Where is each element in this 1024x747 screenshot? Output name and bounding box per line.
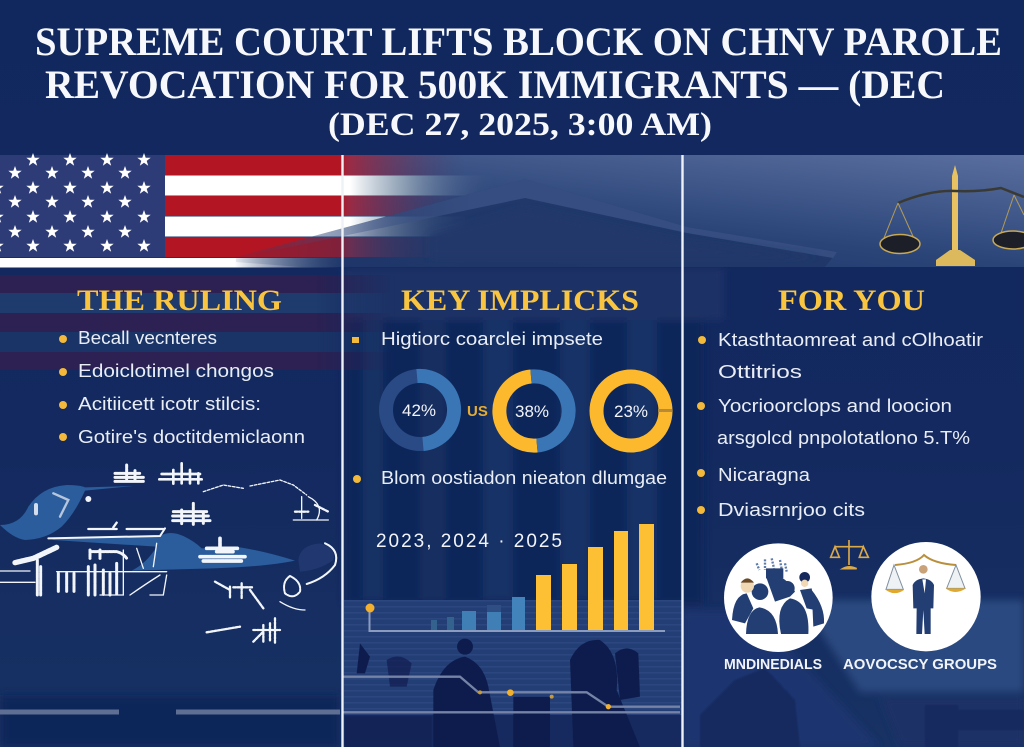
background: lower dark base (344, 668, 1024, 747)
donut chart: 38% (499, 376, 569, 446)
icon: advocacy figure with scales (871, 542, 981, 651)
hero band: sky background (0, 155, 1024, 267)
donut chart: 23%: 23% (614, 402, 648, 421)
donut chart: 38%: 38% (515, 402, 549, 421)
courthouse pediment (236, 179, 837, 267)
label: individuals: MNDINEDIALS (724, 656, 822, 673)
bullet list: for you: Yocrioorclops and loocion (718, 396, 952, 416)
bullet list: for you: Ktasthtaomreat and cOlhoatir (718, 330, 983, 350)
bullet: change: Blom oostiadon nieaton dlumgae (381, 468, 667, 488)
bullet list: for you (697, 330, 983, 520)
page title (35, 19, 1002, 143)
icon: gold scales of justice (880, 165, 1024, 266)
bullet list: for you: arsgolcd pnpolotatlono 5.T% (717, 428, 970, 448)
heading: The Ruling: THE RULING (77, 284, 282, 317)
bar chart (366, 524, 665, 631)
bullet list: ruling: Gotire's doctitdemiclaonn (78, 427, 305, 447)
bullet list: ruling (59, 328, 305, 447)
bullet list: for you: Dviasrnrjoo cits (718, 500, 865, 520)
column dividers (342, 155, 682, 747)
panel: The Ruling (0, 284, 336, 643)
label: versus: US (467, 403, 488, 420)
donut chart: 42% (386, 376, 454, 444)
bullet list: for you: Ottitrios (718, 362, 802, 382)
bullet list: ruling: Acitiicett icotr stilcis: (78, 394, 261, 414)
heading: Key Implicks: KEY IMPLICKS (401, 284, 639, 317)
bullet list: ruling: Edoiclotimel chongos (78, 361, 274, 381)
bullet list: for you: Nicaragna (718, 465, 811, 485)
bullet: impact: Higtiorc coarclei impsete (381, 329, 603, 349)
page title: (DEC 27, 2025, 3:00 AM) (328, 107, 712, 143)
donut chart: 23% (596, 376, 672, 446)
left panel floor rail (0, 710, 340, 714)
label: advocacy groups: AOVOCSCY GROUPS (843, 656, 997, 673)
icon: individuals group (724, 543, 833, 652)
bullet list: ruling: Becall vecnteres (78, 328, 217, 348)
panel: For You (697, 284, 997, 673)
background: stair steps (344, 600, 682, 715)
page title: REVOCATION FOR 500K IMMIGRANTS — (DEC (45, 62, 945, 107)
faded flag stripes behind The Ruling (0, 275, 364, 370)
American flag (0, 153, 495, 268)
background: courthouse columns and steps (0, 268, 1024, 747)
icon: small gold scales (831, 540, 868, 569)
page title: SUPREME COURT LIFTS BLOCK ON CHNV PAROLE (35, 19, 1002, 64)
silhouettes: seated people and railing (343, 639, 680, 747)
donut chart: 42%: 42% (402, 401, 436, 420)
illustration: sketched map with blue shapes (0, 463, 336, 643)
chart labels: years: 2023, 2024 · 2025 (376, 531, 562, 552)
heading: For You: FOR YOU (778, 284, 925, 317)
panel: Key Implicks (343, 284, 680, 747)
